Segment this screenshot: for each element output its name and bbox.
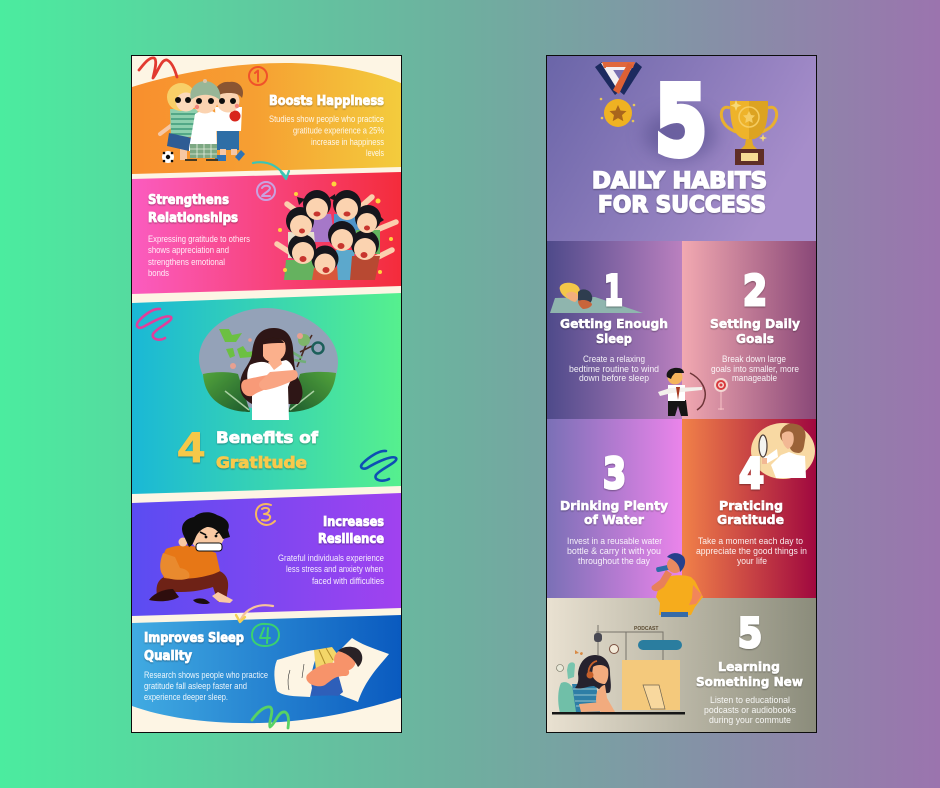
- habit 4: gratitude: [682, 419, 816, 598]
- body text: [144, 670, 268, 702]
- heading: Getting Enough: [560, 316, 668, 331]
- body text: throughout the day: [578, 556, 650, 566]
- body text: Listen to educational: [710, 695, 790, 705]
- icon: target: [714, 378, 728, 410]
- icon: number 1: [249, 67, 267, 85]
- heading: [710, 316, 800, 346]
- band 4: increases resilience: [132, 493, 401, 616]
- heading: Something New: [696, 674, 803, 689]
- title: daily habits for success: [592, 169, 767, 218]
- heading: Relationships: [148, 211, 238, 226]
- body text: your life: [737, 556, 767, 566]
- heading: Strengthens: [148, 193, 229, 208]
- heading: benefits of gratitude: [216, 428, 319, 472]
- panel: 5 daily habits: [546, 56, 816, 732]
- body text: less stress and anxiety when: [286, 564, 383, 574]
- heading: Quality: [144, 649, 192, 664]
- illustration: podcast listener: [552, 625, 685, 714]
- body text: levels: [366, 148, 384, 158]
- illustration: woman with mirror: [751, 423, 815, 479]
- icon: number 2: [257, 182, 275, 200]
- numeral 4: 4: [739, 449, 764, 498]
- body text: Create a relaxing: [583, 354, 645, 364]
- heading: of Water: [584, 512, 645, 527]
- icon: medal ribbon: [595, 62, 642, 127]
- heading: Resilience: [318, 532, 384, 547]
- body text: [269, 114, 384, 158]
- heading: Improves Sleep: [144, 631, 244, 646]
- band 2: strengthens relationships: [132, 172, 401, 294]
- illustration: sleeping couple: [550, 283, 643, 313]
- body text: Research shows people who practice: [144, 670, 268, 680]
- heading: Drinking Plenty: [560, 498, 668, 513]
- heading: [696, 659, 803, 689]
- heading: benefits of gratitude: Gratitude: [216, 453, 307, 472]
- scribble: blue: [361, 451, 396, 481]
- heading: [717, 498, 784, 527]
- heading: [144, 631, 244, 664]
- body text: bedtime routine to wind: [569, 364, 659, 374]
- illustration: three friends: [160, 79, 245, 163]
- band 3: title band: [132, 293, 401, 494]
- arrow: teal curved: [253, 162, 289, 179]
- body text: [711, 354, 799, 383]
- heading: [560, 498, 668, 527]
- title: daily habits for success: DAILY HABITS: [592, 169, 767, 194]
- body text: Grateful individuals experience: [278, 553, 384, 563]
- body text: down before sleep: [579, 373, 649, 383]
- heading: benefits of gratitude: Benefits of: [216, 428, 319, 447]
- body text: goals into smaller, more: [711, 364, 799, 374]
- illustration: woman hugging herself: [199, 308, 338, 420]
- heading: [318, 515, 384, 547]
- icon: number 4: [252, 624, 279, 646]
- body text: gratitude fall asleep faster and: [144, 681, 247, 691]
- band 5: improves sleep quality: [132, 615, 401, 723]
- numeral 5: 5: [738, 611, 762, 657]
- body text: faced with difficulties: [312, 576, 384, 586]
- scribble: red top: [139, 58, 177, 78]
- numeral 1: 1: [604, 266, 623, 315]
- heading: Sleep: [596, 331, 632, 346]
- illustration: podcast listener: PODCAST: [634, 626, 658, 632]
- body text: [704, 695, 796, 725]
- illustration: person drinking water: [651, 553, 703, 617]
- band 1: boosts happiness: [132, 63, 401, 174]
- icon: trophy: [721, 100, 777, 165]
- header section: [547, 56, 816, 241]
- body text: [569, 354, 659, 383]
- icon: number 3: [256, 504, 275, 525]
- body text: shows appreciation and: [148, 245, 229, 255]
- illustration: determined boy: [149, 512, 233, 604]
- body text: manageable: [732, 373, 777, 383]
- scribble: green bottom: [252, 707, 289, 728]
- heading: Boosts Happiness: [269, 94, 384, 109]
- heading: Goals: [736, 331, 774, 346]
- body text: Expressing gratitude to others: [148, 234, 250, 244]
- habit 1: sleep: [547, 241, 682, 419]
- numeral 3: 3: [603, 449, 626, 498]
- body text: experience deeper sleep.: [144, 692, 228, 702]
- body text: during your commute: [709, 715, 791, 725]
- heading: Setting Daily: [710, 316, 800, 331]
- title: daily habits for success: FOR SUCCESS: [598, 193, 766, 218]
- illustration: group of children: [277, 182, 396, 280]
- habit 3: water: [547, 419, 682, 598]
- body text: bonds: [148, 268, 169, 278]
- body text: appreciate the good things in: [696, 546, 807, 556]
- habit 5: learning: [547, 553, 816, 732]
- illustration: person sleeping: [274, 638, 389, 702]
- heading: Increases: [323, 515, 384, 530]
- arrow: peach curved: [236, 605, 273, 622]
- numeral 5: 5: [655, 67, 707, 177]
- body text: [567, 536, 662, 566]
- illustration: archer: [658, 368, 705, 416]
- body text: Break down large: [722, 354, 786, 364]
- heading: [148, 193, 238, 226]
- heading: Praticing: [719, 498, 783, 513]
- numeral 2: 2: [743, 266, 767, 315]
- body text: Invest in a reusable water: [567, 536, 662, 546]
- body text: bottle & carry it with you: [567, 546, 661, 556]
- body text: increase in happiness: [311, 137, 384, 147]
- soft shadow behind numeral: [644, 111, 716, 159]
- body text: Take a moment each day to: [698, 536, 803, 546]
- body text: gratitude experience a 25%: [293, 126, 384, 136]
- body text: Studies show people who practice: [269, 114, 384, 124]
- body text: [696, 536, 807, 566]
- body text: podcasts or audiobooks: [704, 705, 796, 715]
- numeral 4: 4: [178, 424, 204, 472]
- heading: Learning: [718, 659, 780, 674]
- habit 2: goals: [682, 241, 816, 419]
- scribble: pink: [137, 309, 171, 340]
- panel: 4 benefits of gratitude: [132, 56, 402, 732]
- body text: [148, 234, 250, 278]
- body text: [278, 553, 384, 586]
- body text: strengthens emotional: [148, 257, 225, 267]
- heading: [560, 316, 668, 346]
- heading: Gratitude: [717, 512, 784, 527]
